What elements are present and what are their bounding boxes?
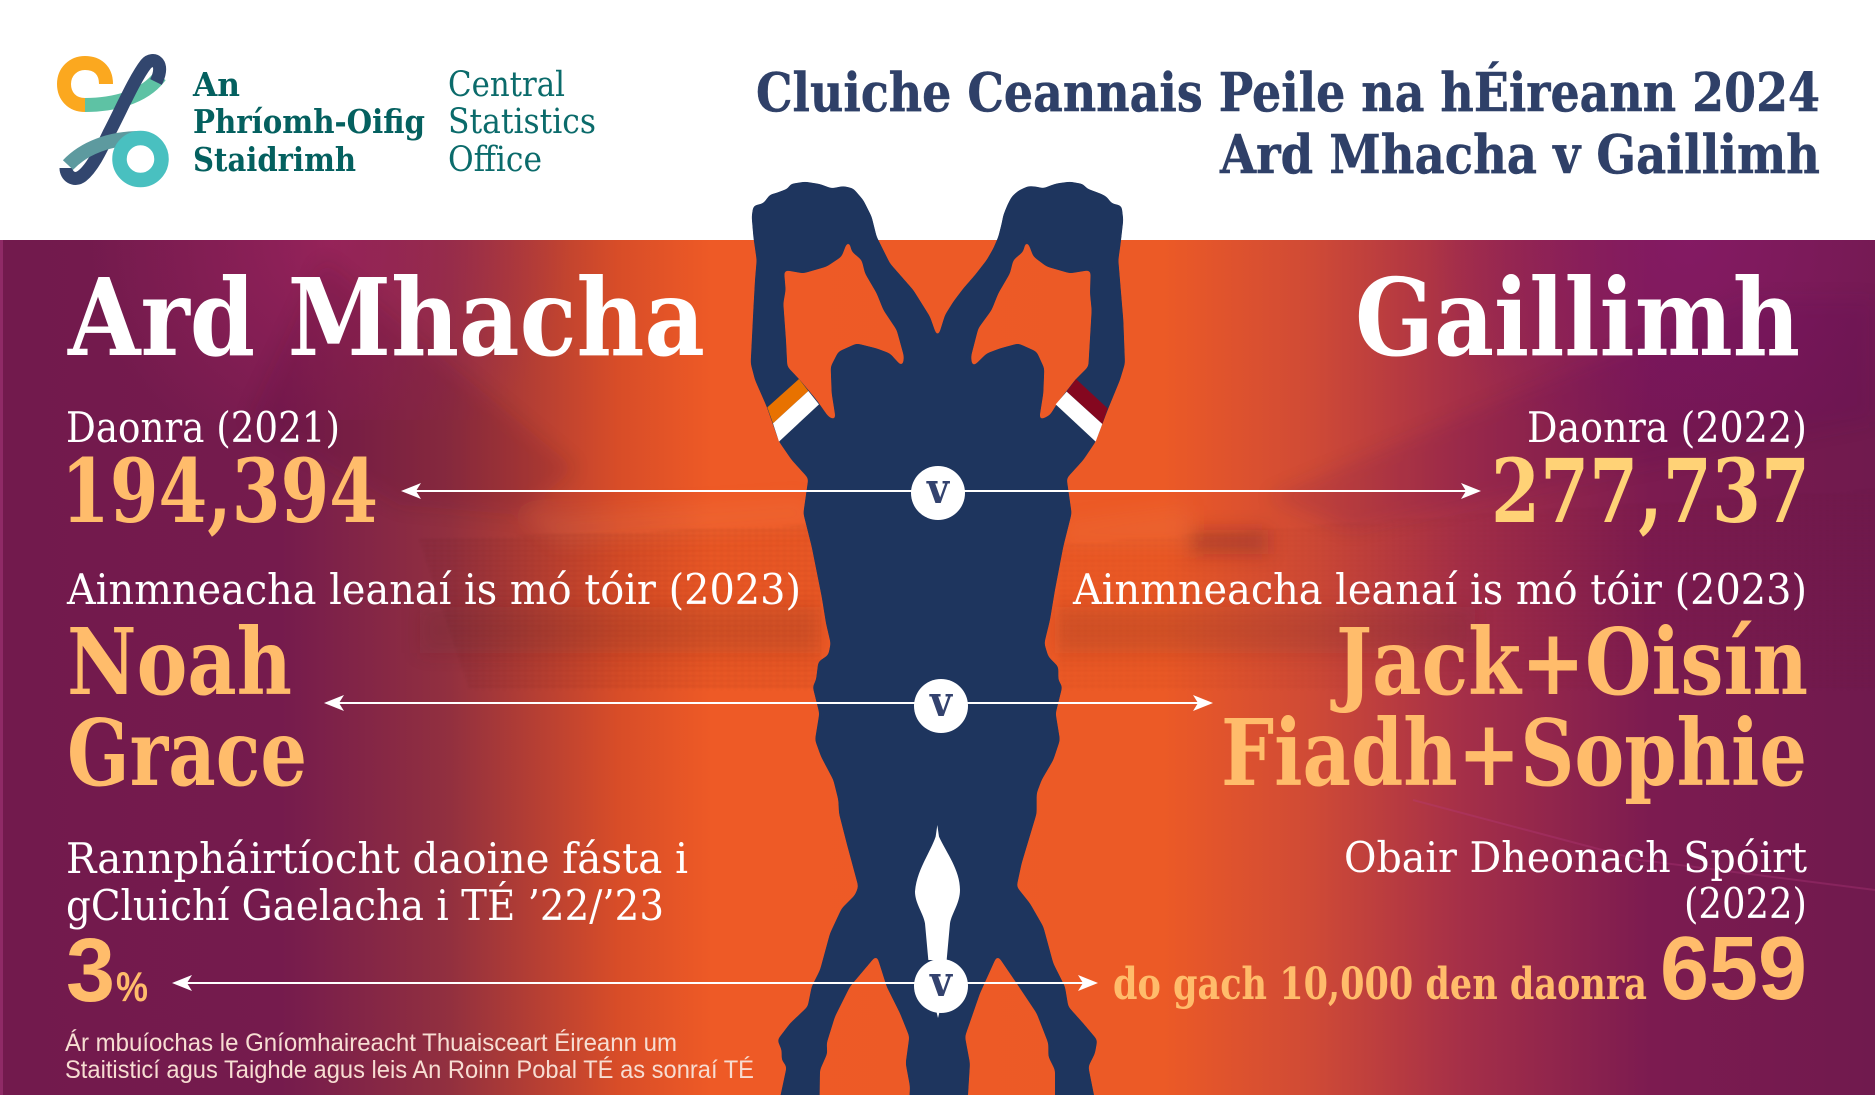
heading: Gaillimh: Gaillimh (1355, 256, 1800, 381)
header background (0, 0, 1875, 240)
footnote: acknowledgement: Staitisticí agus Taighde agus leis An Roinn Pobal TÉ as sonraí TÉ (65, 1055, 754, 1084)
stat: Armagh Gaelic games participation: % (116, 963, 148, 1010)
panel: stadium background (0, 240, 1875, 1095)
logo text: English name: Statistics (448, 102, 596, 142)
logo text: English name: Central (448, 65, 565, 105)
logo: CSO mark (64, 61, 162, 180)
stat: Galway sports volunteering: do gach 10,000 den daonra (1113, 959, 1647, 1010)
stat: Armagh Gaelic games participation: 3 (66, 921, 115, 1021)
white gap between legs (915, 825, 960, 960)
stat: Galway baby names: Ainmneacha leanaí is mó tóir (2023) (1072, 565, 1807, 614)
logo text: Irish name: An (192, 65, 240, 104)
stat: Armagh Gaelic games participation (66, 834, 688, 1021)
logo text: English name (448, 65, 596, 180)
arrow row 3 (172, 957, 1098, 1018)
footnote: acknowledgement (65, 1028, 754, 1084)
logo text: Irish name: Phríomh-Oifig (193, 102, 425, 141)
sleeve band: Armagh (767, 379, 819, 442)
sleeve band: Galway (1056, 379, 1108, 442)
stat: Galway sports volunteering: Obair Dheonach Spóirt (1344, 833, 1807, 882)
silhouette of two players catching a ball (751, 182, 1125, 1095)
stat: Armagh baby names: Grace (67, 699, 307, 807)
footnote: acknowledgement: Ár mbuíochas le Gníomhaireacht Thuaisceart Éireann um (65, 1028, 677, 1057)
stat: Armagh Gaelic games participation: gCluichí Gaelacha i TÉ ’22/’23 (66, 880, 664, 930)
stat: Galway sports volunteering (1113, 833, 1807, 1019)
stat: Armagh population (61, 403, 378, 543)
stat: Armagh population: Daonra (2021) (66, 403, 340, 452)
heading: Ard Mhacha: Ard Mhacha (67, 256, 705, 381)
logo text: Irish name (192, 65, 425, 179)
arrow row 1 (401, 464, 1481, 520)
arrow row 2: v (929, 677, 953, 726)
player body (751, 182, 1125, 1095)
stat: Galway sports volunteering: 659 (1660, 919, 1807, 1019)
stat: Armagh Gaelic games participation: Rannpháirtíocht daoine fásta i (66, 834, 688, 883)
title (756, 62, 1820, 186)
stat: Armagh baby names (66, 565, 801, 807)
stat: Galway population: Daonra (2022) (1527, 403, 1807, 452)
logo text: English name: Office (448, 140, 542, 180)
stat: Galway sports volunteering: (2022) (1684, 879, 1807, 928)
stat: Galway baby names (1072, 565, 1808, 807)
stat: Armagh baby names: Ainmneacha leanaí is mó tóir (2023) (66, 565, 801, 614)
arrow row 2 (324, 677, 1213, 733)
stat: Galway population (1491, 403, 1810, 543)
arrow row 3: v (929, 957, 953, 1006)
logo text: Irish name: Staidrimh (193, 140, 356, 179)
arrow row 1: v (926, 464, 950, 513)
stat: Armagh population: 194,394 (61, 439, 378, 543)
stat: Armagh baby names: Noah (67, 608, 292, 716)
